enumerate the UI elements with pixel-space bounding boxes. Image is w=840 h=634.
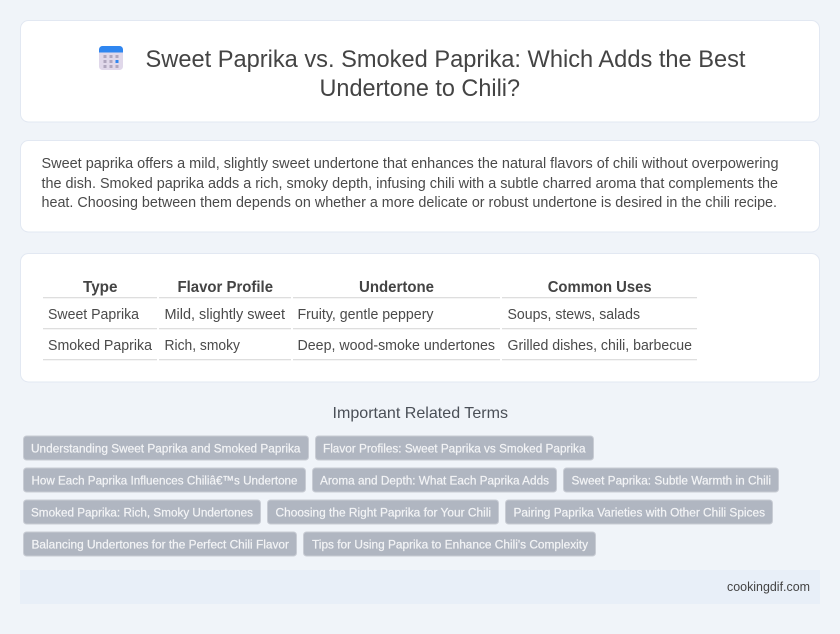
table row: sweet paprika: Sweet Paprika [48, 307, 139, 323]
tag [268, 500, 498, 524]
tag [564, 468, 778, 492]
table header: Undertone [359, 279, 434, 296]
tag [24, 500, 260, 524]
text block: introduction: Sweet paprika offers a mild, slightly sweet undertone that enhances the natural flavors of chili without overpowering [42, 156, 779, 172]
tag [24, 532, 296, 556]
tag: Tips for Using Paprika to Enhance Chili's Complexity [312, 538, 589, 552]
tag [304, 532, 596, 556]
table header: Flavor Profile [178, 279, 273, 296]
table row: smoked paprika [48, 338, 692, 354]
tag [312, 468, 556, 492]
table row: smoked paprika: Smoked Paprika [48, 338, 152, 354]
related term tags [24, 436, 778, 556]
table header [83, 279, 652, 296]
panel: introduction [20, 140, 820, 232]
panel: comparison table [20, 254, 820, 382]
tag: Balancing Undertones for the Perfect Chili Flavor [32, 538, 289, 552]
tag [316, 436, 594, 460]
table row: sweet paprika: Fruity, gentle peppery [298, 307, 434, 323]
table row: sweet paprika: Mild, slightly sweet [164, 307, 285, 323]
tag: Flavor Profiles: Sweet Paprika vs Smoked Paprika [323, 442, 586, 456]
tag [506, 500, 772, 524]
tag: Choosing the Right Paprika for Your Chili [276, 506, 491, 520]
title: Sweet Paprika vs. Smoked Paprika: Which Adds the Best [146, 46, 746, 73]
text block: introduction: heat. Choosing between them depends on whether a more delicate or robust undertone is desired in the chili recipe. [42, 195, 777, 211]
tag: Aroma and Depth: What Each Paprika Adds [320, 474, 549, 488]
title: Undertone to Chili? [320, 75, 520, 102]
table row: sweet paprika: Soups, stews, salads [508, 307, 640, 323]
tag: Pairing Paprika Varieties with Other Chili Spices [514, 506, 765, 520]
table row: sweet paprika [48, 307, 640, 323]
tag [24, 468, 306, 492]
footer [20, 570, 820, 604]
table row: smoked paprika: Deep, wood-smoke undertones [298, 338, 495, 354]
table row: smoked paprika: Grilled dishes, chili, barbecue [508, 338, 692, 354]
tag: Understanding Sweet Paprika and Smoked Paprika [31, 442, 301, 456]
panel: header [20, 20, 820, 122]
footer source: cookingdif.com [727, 580, 810, 594]
tag: Smoked Paprika: Rich, Smoky Undertones [31, 506, 253, 520]
heading: related terms: Important Related Terms [332, 405, 508, 422]
tag: How Each Paprika Influences Chiliâ€™s Undertone [32, 474, 298, 488]
table header: Common Uses [548, 279, 652, 296]
tag [24, 436, 308, 460]
icon: calendar [99, 46, 123, 70]
tag: Sweet Paprika: Subtle Warmth in Chili [572, 474, 771, 488]
table row: smoked paprika: Rich, smoky [164, 338, 241, 354]
text block: introduction: the dish. Smoked paprika adds a rich, smoky depth, infusing chili with a subtle charred aroma that complements the [42, 176, 778, 192]
table header: Type [83, 279, 118, 296]
